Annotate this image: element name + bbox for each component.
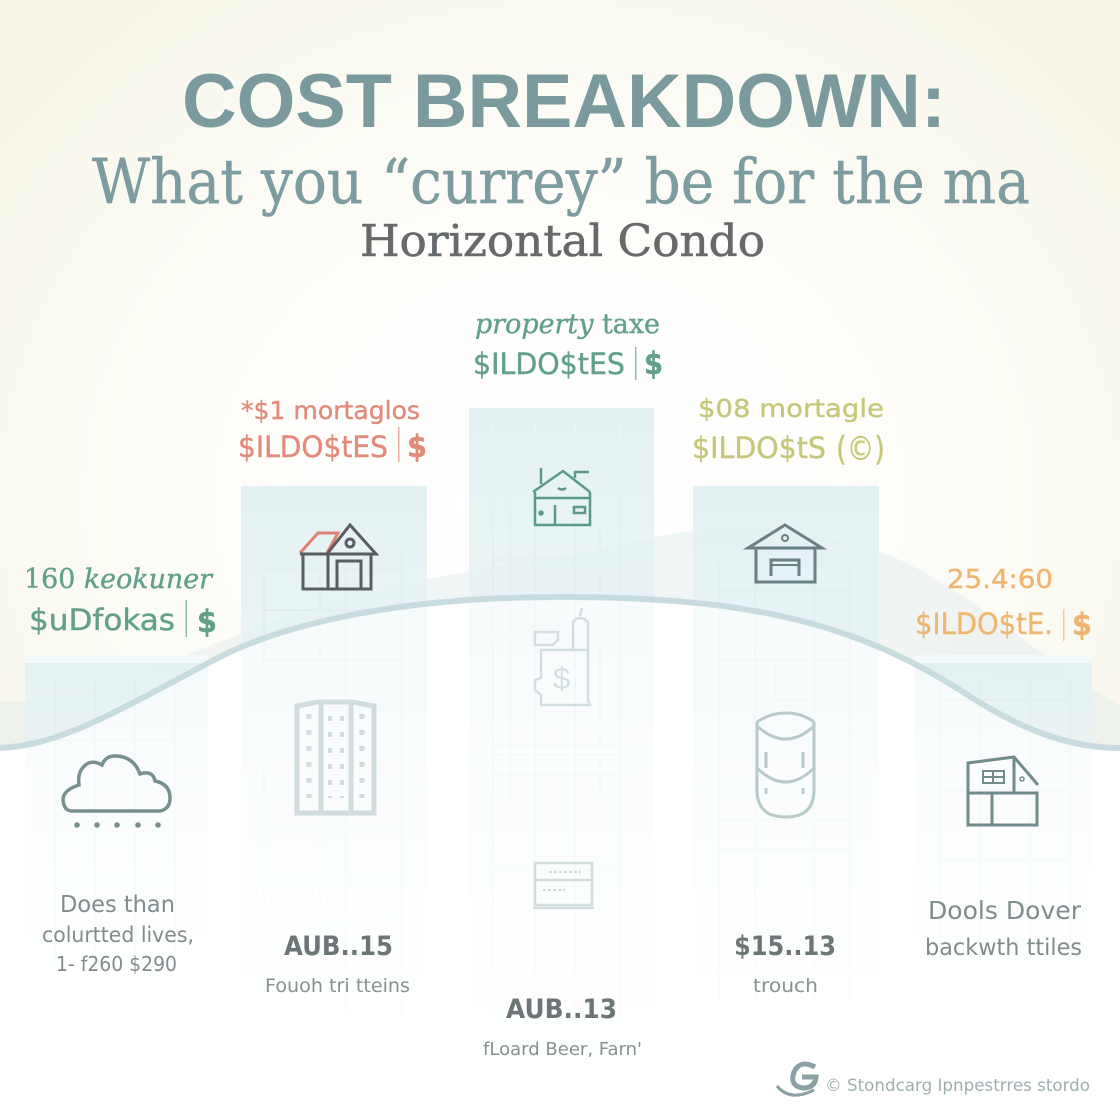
text block: column 5: backwth ttiles — [925, 935, 1082, 961]
label: column 3: $ILDO$tES — [473, 347, 625, 381]
label: column 3: property taxe — [475, 309, 660, 340]
text block: column 1: Does than — [60, 892, 175, 918]
icon: apartment building — [297, 702, 374, 813]
translucent wave band — [0, 529, 1120, 750]
wave line — [0, 597, 1120, 748]
icon: cylinder — [757, 713, 814, 817]
text block: column 2 — [265, 931, 410, 997]
icon: small box — [533, 863, 594, 908]
label: column 4: $08 mortagle — [698, 394, 884, 423]
icon: cutaway house — [968, 757, 1038, 825]
label: column 3 — [473, 309, 663, 382]
label: column 2 — [238, 396, 427, 465]
white area below wave — [0, 597, 1120, 1120]
label: column 1 — [24, 564, 217, 640]
text block: column 5 — [925, 896, 1082, 961]
white veil over panels below wave — [0, 597, 1120, 1120]
text block: column 1: colurtted lives, — [42, 923, 194, 947]
label: column 4: $ILDO$tS — [692, 431, 826, 465]
subtitle: What you “currey” be for the ma — [92, 145, 1030, 218]
panel: column 1 — [25, 655, 208, 1000]
panel: column 2 — [241, 486, 427, 1050]
icon: red roof house — [300, 525, 376, 589]
footer credit: © Stondcarg Ipnpestrres stordo — [825, 1076, 1090, 1096]
panel: column 4 — [693, 486, 879, 1050]
label: column 5: 25.4:60 — [947, 565, 1053, 595]
text block: column 3 — [483, 994, 642, 1060]
label: column 2: *$1 mortaglos — [241, 396, 420, 425]
label: column 2: $ILDO$tES — [238, 430, 388, 464]
text block: column 4: $15..13 — [734, 931, 836, 962]
text block: column 4: trouch — [753, 975, 818, 997]
label: column 1: $uDfokas — [29, 603, 175, 637]
icon: tax document — [535, 608, 590, 705]
panel: column 5 — [915, 655, 1092, 1000]
icon: tax document: $ — [553, 661, 570, 696]
text block: column 1 — [42, 892, 194, 976]
icon: garage house — [748, 525, 822, 582]
icon: cloud — [63, 756, 170, 828]
label: column 5: $ — [1072, 607, 1092, 643]
title: COST BREAKDOWN: — [182, 59, 946, 144]
label: column 4: (©) — [836, 429, 885, 468]
text block: column 3: fLoard Beer, Farn' — [483, 1039, 642, 1060]
label: column 3: $ — [644, 346, 663, 382]
label: column 5: $ILDO$tE. — [915, 607, 1053, 641]
label: column 4 — [692, 394, 885, 468]
text block: column 2: Fouoh tri tteins — [265, 975, 410, 997]
panel: column 3 — [469, 408, 654, 1108]
label: column 5 — [915, 565, 1092, 643]
text block: column 4 — [734, 931, 836, 997]
text block: column 2: AUB..15 — [284, 931, 393, 962]
condo heading: Horizontal Condo — [360, 216, 765, 267]
label: column 1: $ — [197, 604, 217, 640]
text block: column 1: 1- f260 $290 — [56, 952, 177, 976]
label: column 2: $ — [407, 429, 427, 465]
label: column 1: 160 keokuner — [24, 564, 214, 595]
text block: column 3: AUB..13 — [506, 994, 617, 1025]
footer logo — [777, 1064, 816, 1095]
icon: teal house — [533, 468, 590, 525]
text block: column 5: Dools Dover — [928, 896, 1082, 925]
